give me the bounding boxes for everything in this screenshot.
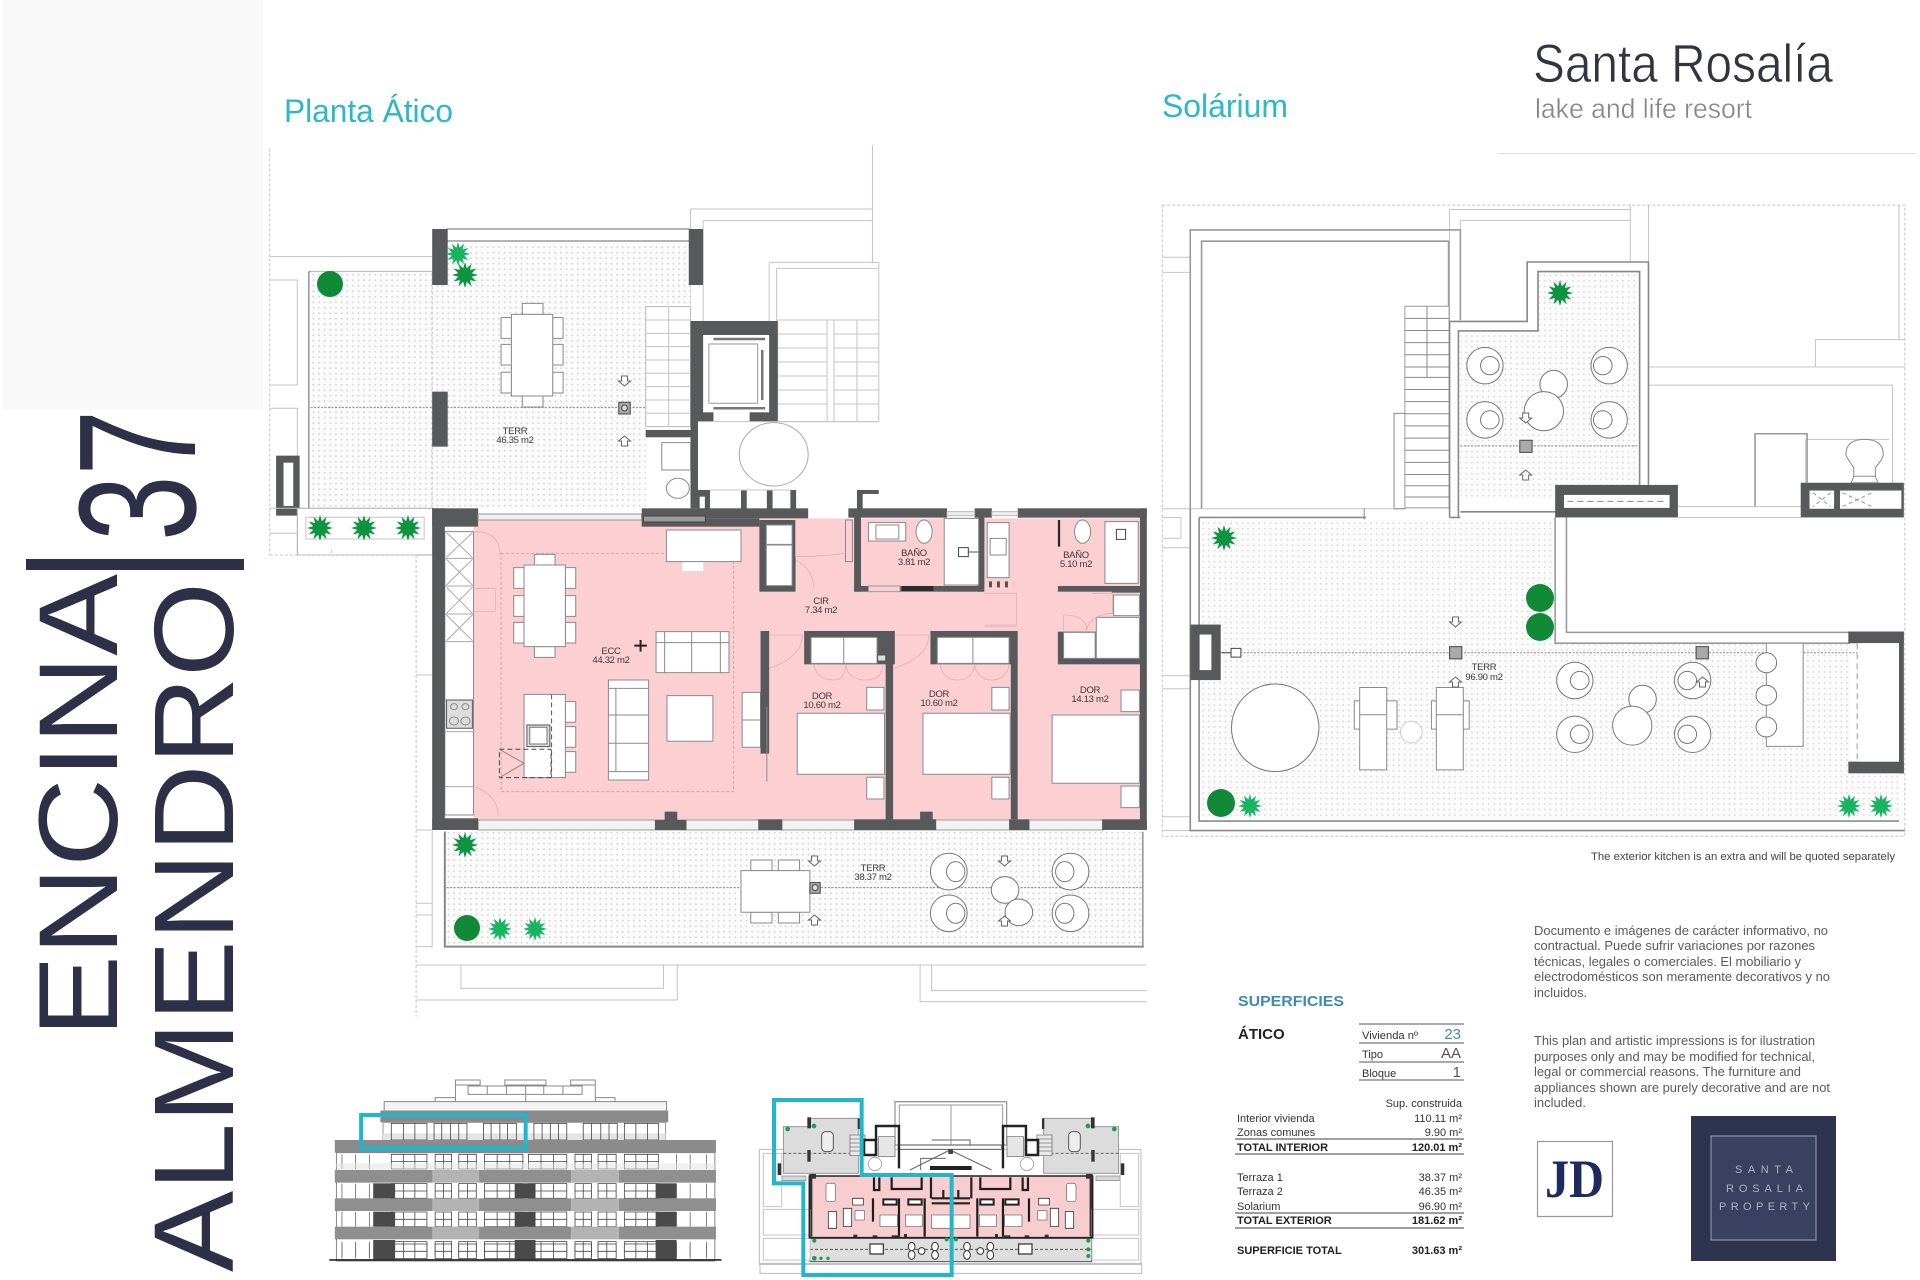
upper terrace lounge [1467,347,1627,438]
dining table [514,554,576,657]
surface rows: Sup. construida [1386,1098,1463,1110]
surface rows: TOTAL INTERIOR [1237,1142,1328,1154]
logo: Santa Rosalia Property: SANTA [1735,1164,1794,1176]
background panel top left [3,0,263,410]
main terrace floor [1202,520,1899,819]
panel: superficies table [1235,993,1464,1257]
drains [1221,440,1708,659]
surface rows: 46.35 m² [1419,1186,1462,1198]
service room walls and fixtures [646,412,879,509]
text block: disclaimer spanish: incluidos. [1534,985,1587,1000]
room labels main plan: BAÑO [1063,550,1089,561]
closet bedroom 1 [804,631,895,664]
terrace dark walls [276,229,703,516]
key plan highlight on floor plan [774,1100,952,1275]
sunbathing furniture [1232,684,1469,772]
surface rows: 38.37 m² [1419,1172,1462,1184]
room label solárium [1465,662,1503,683]
text block: disclaimer english: included. [1534,1095,1586,1110]
heading: ático: ÁTICO [1238,1026,1285,1043]
surface rows: Interior vivienda [1237,1113,1316,1125]
room label solárium: 96.90 m2 [1465,672,1503,683]
text block: disclaimer spanish [1534,923,1830,1000]
surface rows: 301.63 m² [1412,1245,1462,1257]
sofa [608,680,649,780]
surface rows: Terraza 1 [1237,1172,1283,1184]
text block: disclaimer english [1534,1033,1830,1110]
armchair sofa [656,632,729,673]
text block: disclaimer english: legal or commercial reasons. The furniture and [1534,1064,1801,1079]
surface rows: 96.90 m² [1419,1201,1462,1213]
room labels main plan: BAÑO [901,548,927,559]
note: exterior kitchen: The exterior kitchen is an extra and will be quoted separately [1591,851,1896,863]
heading: superficies: SUPERFICIES [1238,993,1344,1010]
text block: disclaimer spanish: electrodomésticos son meramente decorativos y no [1534,969,1830,984]
TV unit [742,692,761,747]
living dashed zone [501,553,734,792]
plus marker [634,640,647,652]
kitchen counter [445,532,474,815]
south terrace floor [447,832,1142,944]
text block: disclaimer spanish: Documento e imágenes de carácter informativo, no [1534,923,1828,938]
south terrace table [741,860,820,923]
surface rows: 9.90 m² [1425,1127,1462,1139]
elevator core [690,321,778,422]
closet bedroom 2 [930,631,1017,664]
surface rows: 110.11 m² [1414,1113,1462,1125]
coffee table [667,696,713,741]
upper terrace floor [1460,272,1639,499]
room labels main plan: 14.13 m2 [1071,694,1109,705]
room labels main plan: DOR [1080,685,1101,696]
top walls [432,508,1147,562]
unit data: Bloque [1362,1068,1396,1080]
logo: JD: JD [1545,1149,1604,1209]
heading: Planta Ático: Planta Ático [284,93,453,129]
room label solárium: TERR [1472,662,1497,673]
room labels main plan: TERR [861,863,886,874]
stairs [1364,306,1449,520]
surface rows: 120.01 m² [1412,1142,1462,1154]
surface rows: TOTAL EXTERIOR [1237,1215,1332,1227]
room labels main plan: DOR [812,691,833,702]
title: number 37: 37 [45,410,231,541]
room labels main plan: 10.60 m2 [920,698,958,709]
logo: Santa Rosalia Property [1691,1116,1836,1261]
stairs right [778,320,879,422]
logo: Santa Rosalia Property: PROPERTY [1719,1201,1811,1213]
icons: plants on solárium [1207,280,1893,818]
terrace dining table [501,303,563,407]
title divider bar [26,559,244,570]
unit data: Vivienda nº [1362,1030,1418,1042]
bathroom 1 [854,517,984,592]
room labels main plan [496,426,1109,883]
unit data [1362,1026,1461,1081]
interior pink floor [474,518,1142,820]
heading: Solárium: Solárium [1162,88,1288,124]
room labels main plan: DOR [929,689,950,700]
unit data: Tipo [1362,1049,1383,1061]
room labels main plan: 7.34 m2 [805,605,837,616]
main terrace lounge [1557,662,1711,753]
room labels main plan: 44.32 m2 [592,655,630,666]
floor plan: planta ático upper part [270,145,879,555]
planter [297,508,433,555]
surface rows: Solarium [1237,1201,1280,1213]
bathroom 2 [987,520,1141,592]
text block: disclaimer english: purposes only and may be modified for technical, [1534,1049,1815,1064]
room labels main plan: 3.81 m2 [898,557,930,568]
text block: disclaimer spanish: técnicas, legales o comerciales. El mobiliario y [1534,954,1801,969]
room labels main plan: 5.10 m2 [1060,559,1092,570]
outer and partition walls [432,508,1147,830]
room labels main plan: CIR [813,596,829,607]
floor plan: interior and south terrace [333,508,1147,1017]
closet bedroom 3 [1058,587,1141,664]
door arcs [475,520,1112,815]
surface rows [1237,1098,1463,1257]
room labels main plan: TERR [503,426,528,437]
logo: Santa Rosalía [1497,34,1916,154]
stairs left [646,307,690,427]
outer plan lines [333,555,416,1017]
drain [619,402,630,414]
unit data: 1 [1453,1064,1461,1081]
icons: level arrows on main plan [618,376,1010,926]
surface rows: 181.62 m² [1412,1215,1462,1227]
title: ALMENDRO: ALMENDRO [131,582,257,1272]
beds [797,687,1139,808]
text block: disclaimer spanish: contractual. Puede sufrir variaciones por razones [1534,938,1815,953]
key plan: building elevation [329,1080,721,1261]
text block: disclaimer english: This plan and artistic impressions is for ilustration [1534,1033,1815,1048]
surface rows: Terraza 2 [1237,1186,1283,1198]
exterior bar [1756,643,1803,746]
floor plan: solárium [1162,205,1905,836]
room labels main plan: 46.35 m2 [496,435,534,446]
terrace floor dots [311,243,690,508]
room labels main plan: ECC [601,646,621,657]
bottom façade [432,812,1147,830]
key plan: building floor plan [759,1100,1142,1275]
icons: level arrows on solárium [1450,413,1708,687]
surface rows: Zonas comunes [1237,1127,1316,1139]
unit data: AA [1441,1045,1461,1062]
closet corridor [759,520,796,592]
logo: Santa Rosalía: lake and life resort [1535,93,1752,124]
title: ENCINA: ENCINA [16,574,141,1037]
surface rows: SUPERFICIE TOTAL [1237,1245,1342,1257]
counter and chair [666,530,741,572]
key plan highlight on elevation [361,1115,526,1148]
icons: plants on main plan [307,242,547,941]
unit data: 23 [1444,1026,1461,1043]
logo: Santa Rosalia Property: ROSALIA [1726,1183,1804,1195]
unit box rules [1359,1024,1464,1080]
room labels main plan: 10.60 m2 [803,700,841,711]
text block: disclaimer english: appliances shown are purely decorative and are not [1534,1080,1830,1095]
south terrace lounge chairs [930,853,1089,932]
kitchen island [499,694,576,778]
rear outdoor kitchen shapes [1755,434,1883,507]
vertical title [16,410,257,1272]
dark chimney walls [1190,483,1904,773]
room labels main plan: 38.37 m2 [854,872,892,883]
logo: Santa Rosalía: Santa Rosalía [1533,34,1834,94]
